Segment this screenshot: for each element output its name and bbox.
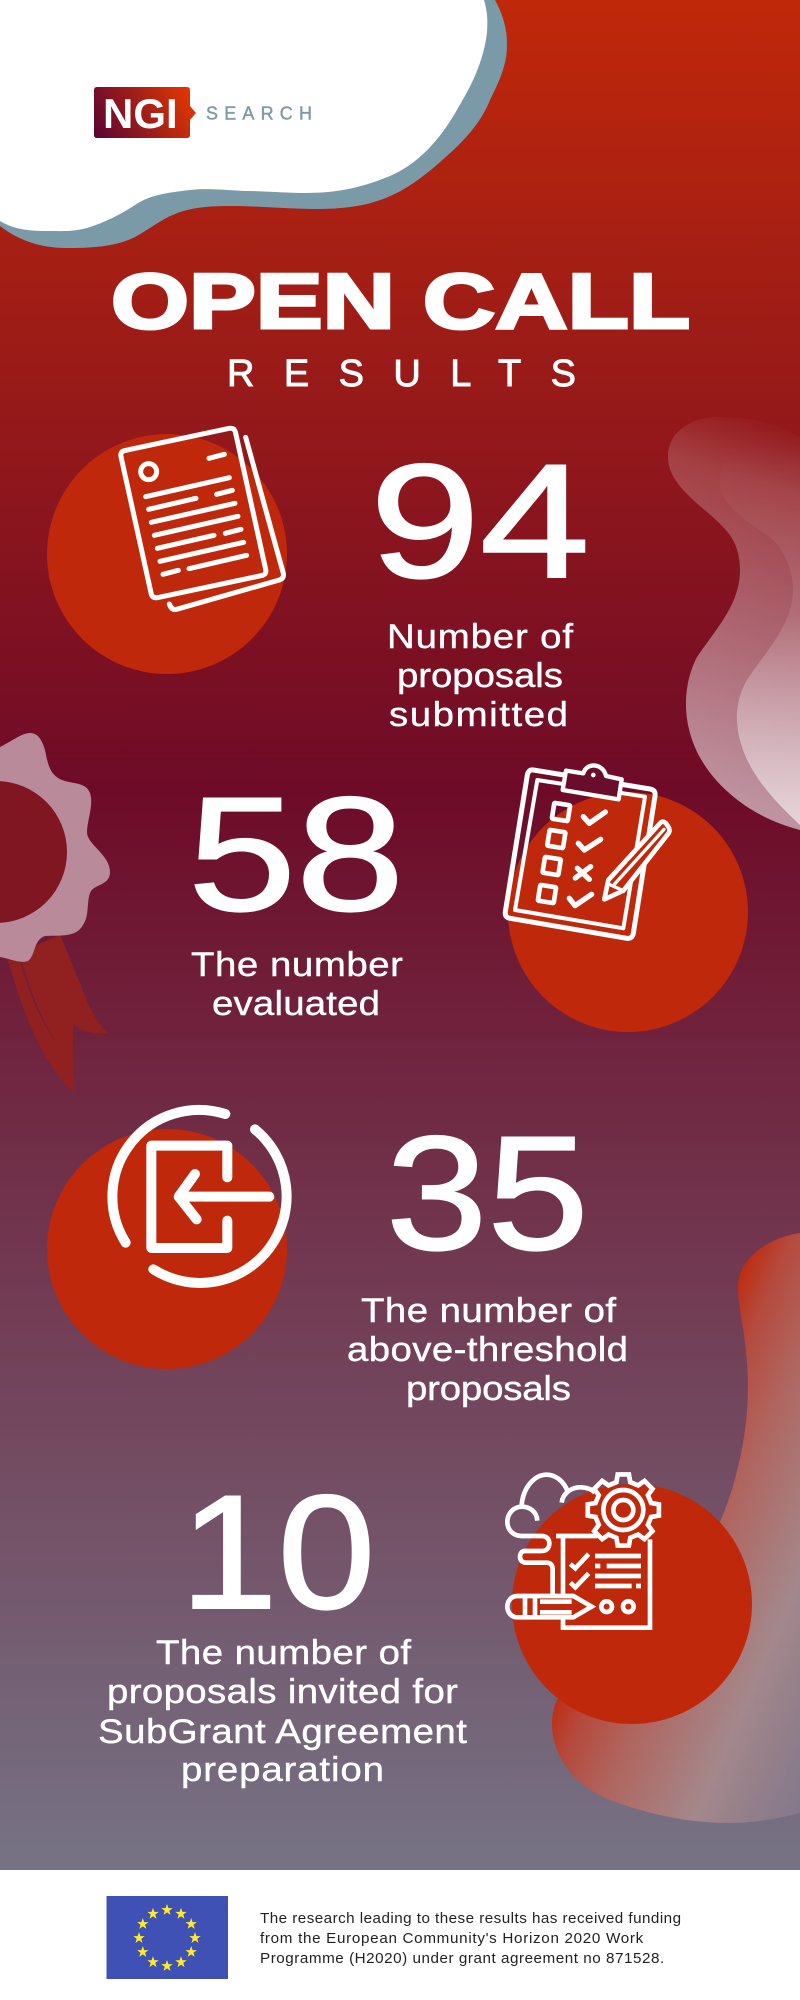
logo badge [94,87,196,138]
circle [512,1484,752,1724]
funding statement [260,1911,681,1967]
white wave [0,0,487,231]
icon: document [121,428,283,610]
circle [47,1129,287,1369]
title [111,259,690,395]
stat 94 proposals submitted [47,428,590,733]
circle [47,434,287,674]
label: Number of [387,617,574,655]
label [191,945,403,1022]
icon: cloud, gear, checklist and pencil [507,1474,659,1628]
header: white wave with logo [0,0,507,248]
funding statement: Programme (H2020) under grant agreement no 871528. [260,1951,664,1967]
footer [0,1870,800,2000]
heading: open call: OPEN CALL [111,259,690,345]
icon: exit arrow in ring [112,1110,287,1283]
funding statement: from the European Community's Horizon 2020 Work [260,1931,644,1947]
label [387,617,574,733]
circle [508,792,748,1032]
logo letters: NGI [103,90,178,137]
label: SubGrant Agreement [98,1712,467,1750]
subheading: results: RESULTS [227,353,576,395]
number: 94 [370,431,590,612]
label: The number of [156,1633,412,1671]
number: 10 [180,1461,375,1643]
stat 58 evaluated [188,763,748,1032]
funding statement: The research leading to these results has received funding [260,1911,681,1927]
decoration: red gradient blob [552,1233,800,1823]
logo wordmark: SEARCH [206,104,312,124]
label [347,1291,628,1407]
label: proposals [406,1369,571,1407]
label: proposals [397,656,563,694]
decoration: translucent smoke shapes [668,417,800,830]
label: proposals invited for [107,1672,458,1710]
grey wave [0,0,507,248]
label: evaluated [212,984,380,1022]
number: 35 [386,1102,589,1284]
stat 10 invited for SubGrant [98,1461,752,1788]
icon: EU flag [106,1896,228,1979]
number: 58 [188,763,404,944]
label: preparation [181,1750,384,1788]
logo [94,87,312,138]
label: The number of [361,1291,617,1329]
stat 35 above-threshold [47,1102,628,1407]
label: submitted [389,695,568,733]
decoration: rosette with ribbon [0,733,110,1092]
footer panel [0,1870,800,2000]
label [98,1633,467,1788]
label: The number [191,945,403,983]
icon: clipboard [505,765,670,938]
label: above-threshold [347,1330,628,1368]
